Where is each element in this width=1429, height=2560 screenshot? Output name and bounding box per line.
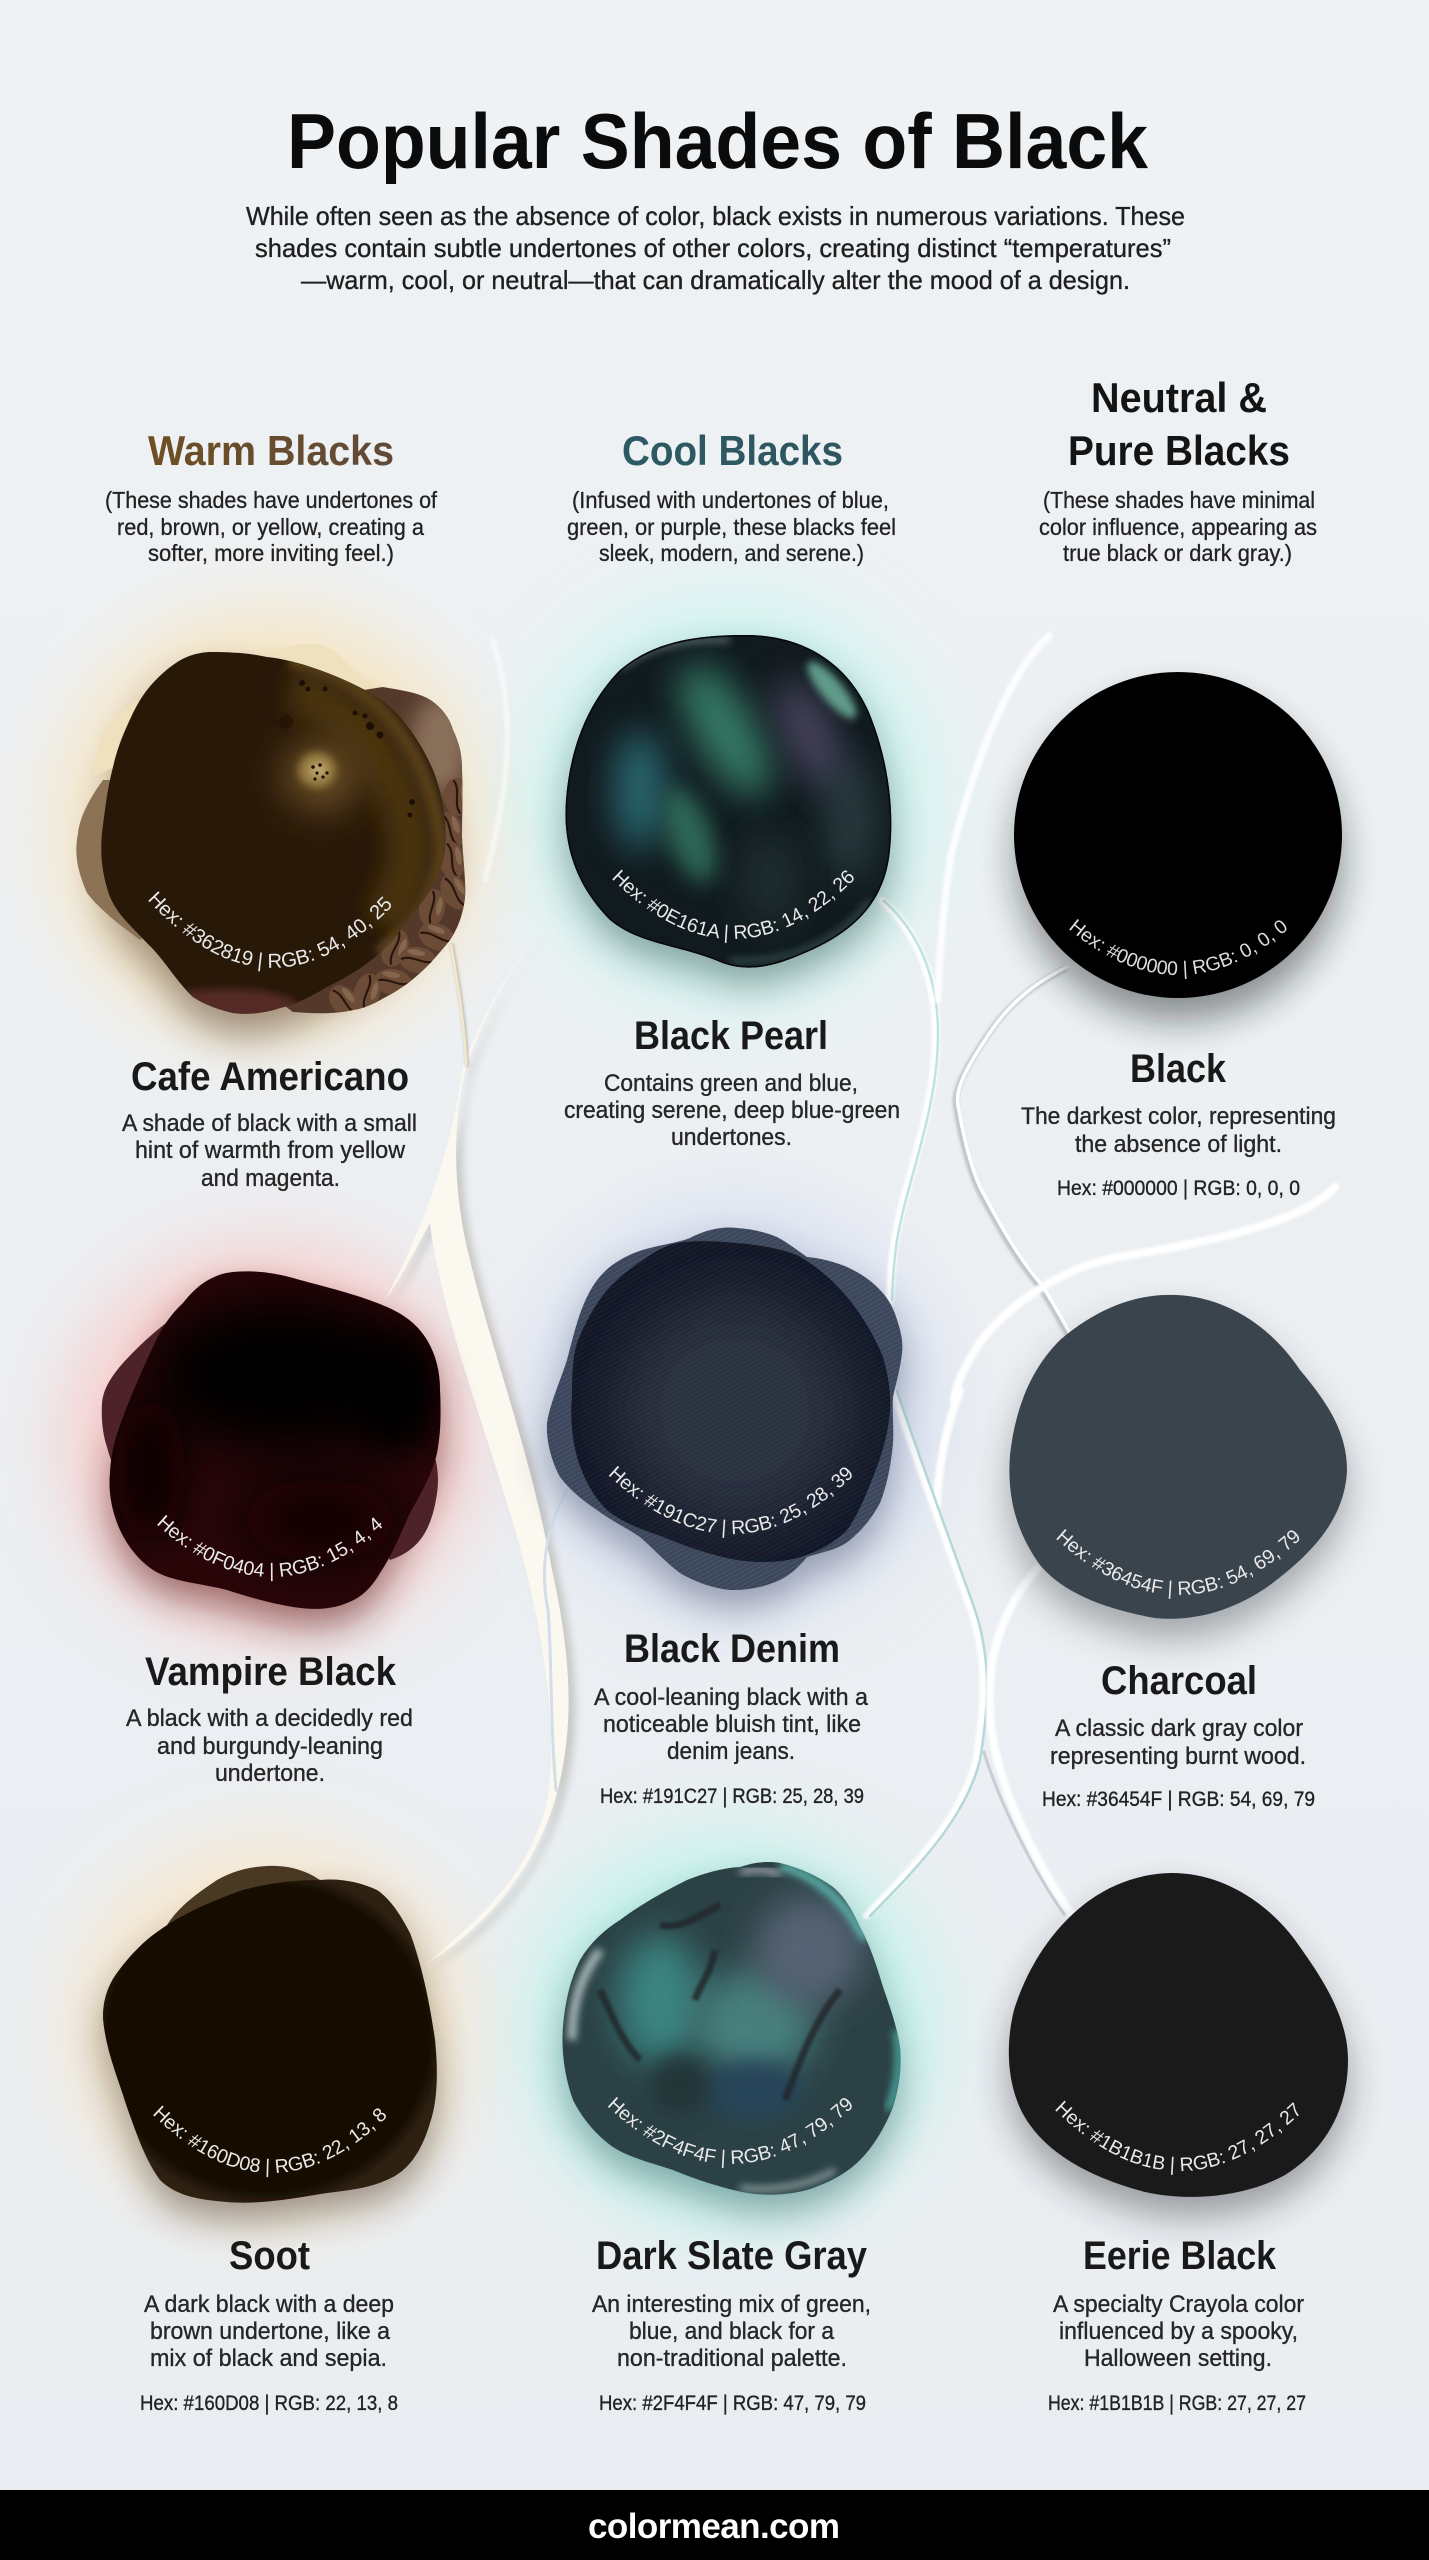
intro text: —warm, cool, or neutral—that can dramatically alter the mood of a design. [301,265,1130,295]
text: soot: Soot [229,2234,310,2278]
text: black pearl: Contains green and blue, [604,1070,858,1097]
text: dark slate gray: Dark Slate Gray [596,2234,868,2278]
intro text: shades contain subtle undertones of other colors, creating distinct “temperatures” [255,233,1171,263]
curved code: black denim: Hex: #191C27 | RGB: 25, 28, 39 [608,1466,852,1538]
curved code: cafe americano: Hex: #362819 | RGB: 54, 40, 25 [148,891,391,972]
text: black: Hex: #000000 | RGB: 0, 0, 0 [1057,1177,1300,1200]
swatch: eerie black [986,1870,1370,2240]
text: dark slate gray [592,2234,871,2415]
text: soot: A dark black with a deep [144,2291,394,2318]
text: black: Black [1130,1047,1227,1091]
footer bar [0,2490,1429,2560]
curved code: soot: Hex: #160D08 | RGB: 22, 13, 8 [153,2106,386,2178]
curved code: eerie black: Hex: #1B1B1B | RGB: 27, 27, 27 [1055,2100,1299,2175]
text: eerie black: A specialty Crayola color [1053,2291,1304,2318]
text: cafe americano: A shade of black with a small [122,1110,417,1137]
column heading: warm blacks [105,427,438,566]
text: vampire black: Vampire Black [145,1650,397,1694]
column heading: cool blacks: Cool Blacks [622,427,843,474]
text: dark slate gray: An interesting mix of green, [592,2291,871,2318]
text: black [1021,1047,1336,1200]
text: charcoal: Charcoal [1101,1659,1257,1703]
text: soot [140,2234,398,2415]
column heading: cool blacks: (Infused with undertones of blue, [572,487,889,513]
curved code: black: Hex: #000000 | RGB: 0, 0, 0 [1069,919,1286,979]
text: soot: brown undertone, like a [150,2318,391,2345]
swatch: dark slate gray [540,1858,922,2235]
text: eerie black: influenced by a spooky, [1059,2318,1298,2345]
text: dark slate gray: non-traditional palette. [617,2345,847,2372]
text: charcoal: representing burnt wood. [1050,1743,1306,1770]
column heading: neutral and pure blacks: color influence, appearing as [1039,514,1317,540]
column heading: neutral and pure blacks: (These shades have minimal [1043,487,1315,513]
text: black denim: denim jeans. [667,1738,795,1765]
text: black pearl: undertones. [671,1124,792,1151]
text: charcoal: Hex: #36454F | RGB: 54, 69, 79 [1042,1788,1315,1811]
column heading: neutral and pure blacks [1039,374,1317,566]
colored glows behind swatches [55,595,940,2225]
text: cafe americano: Cafe Americano [131,1055,409,1099]
curved code: dark slate gray: Hex: #2F4F4F | RGB: 47, 79, 79 [608,2096,852,2168]
text: soot: mix of black and sepia. [150,2345,387,2372]
text: eerie black: Hex: #1B1B1B | RGB: 27, 27, 27 [1048,2392,1306,2415]
text: black pearl [564,1014,900,1151]
text: soot: Hex: #160D08 | RGB: 22, 13, 8 [140,2392,398,2415]
text: black pearl: creating serene, deep blue-green [564,1097,900,1124]
text: black: The darkest color, representing [1021,1103,1336,1130]
column heading: neutral and pure blacks: Neutral & [1091,374,1267,421]
text: eerie black: Eerie Black [1083,2234,1277,2278]
text: cafe americano: and magenta. [201,1165,340,1192]
text: vampire black: undertone. [215,1760,325,1787]
text: black pearl: Black Pearl [634,1014,828,1058]
column heading: neutral and pure blacks: true black or dark gray.) [1063,540,1292,566]
curved code: vampire black: Hex: #0F0404 | RGB: 15, 4, 4 [157,1514,382,1582]
swatch: soot [80,1866,460,2244]
text: black denim [594,1627,869,1808]
swatch: black [992,671,1366,1045]
intro text: While often seen as the absence of color, black exists in numerous variations. These [246,201,1185,231]
text: black denim: Black Denim [624,1627,840,1671]
text: black denim: A cool-leaning black with a [594,1684,869,1711]
column heading: neutral and pure blacks: Pure Blacks [1068,427,1290,474]
text: vampire black [126,1650,413,1787]
column heading: warm blacks: red, brown, or yellow, creating a [117,514,424,540]
intro text [246,201,1185,295]
column heading: warm blacks: Warm Blacks [148,427,394,474]
swatch: cafe americano [76,644,470,1059]
flowing ribbons [383,636,1335,1970]
column heading: cool blacks: green, or purple, these blacks feel [567,514,896,540]
swatch: vampire black [85,1265,466,1652]
text: vampire black: and burgundy-leaning [157,1733,383,1760]
text: black: the absence of light. [1075,1131,1282,1158]
swatch: charcoal [989,1294,1366,1659]
text: vampire black: A black with a decidedly red [126,1705,413,1732]
text: charcoal: A classic dark gray color [1055,1715,1303,1742]
text: cafe americano [122,1055,417,1192]
curved code: black pearl: Hex: #0E161A | RGB: 14, 22, 26 [612,870,854,943]
swatch: black pearl [544,630,914,1007]
swatch: black denim [528,1226,922,1628]
text: black denim: noticeable bluish tint, like [603,1711,861,1738]
text: black denim: Hex: #191C27 | RGB: 25, 28, 39 [600,1785,864,1808]
text: charcoal [1042,1659,1315,1811]
title: Popular Shades of Black [287,97,1149,185]
column heading: cool blacks [567,427,896,566]
column heading: warm blacks: (These shades have undertones of [105,487,438,513]
curved code: charcoal: Hex: #36454F | RGB: 54, 69, 79 [1056,1529,1300,1599]
text: dark slate gray: blue, and black for a [629,2318,835,2345]
footer bar: colormean.com [588,2507,840,2546]
text: eerie black: Halloween setting. [1084,2345,1272,2372]
column heading: warm blacks: softer, more inviting feel.) [148,540,394,566]
text: eerie black [1048,2234,1306,2415]
column heading: cool blacks: sleek, modern, and serene.) [599,540,864,566]
text: dark slate gray: Hex: #2F4F4F | RGB: 47, 79, 79 [599,2392,866,2415]
text: cafe americano: hint of warmth from yellow [135,1137,406,1164]
